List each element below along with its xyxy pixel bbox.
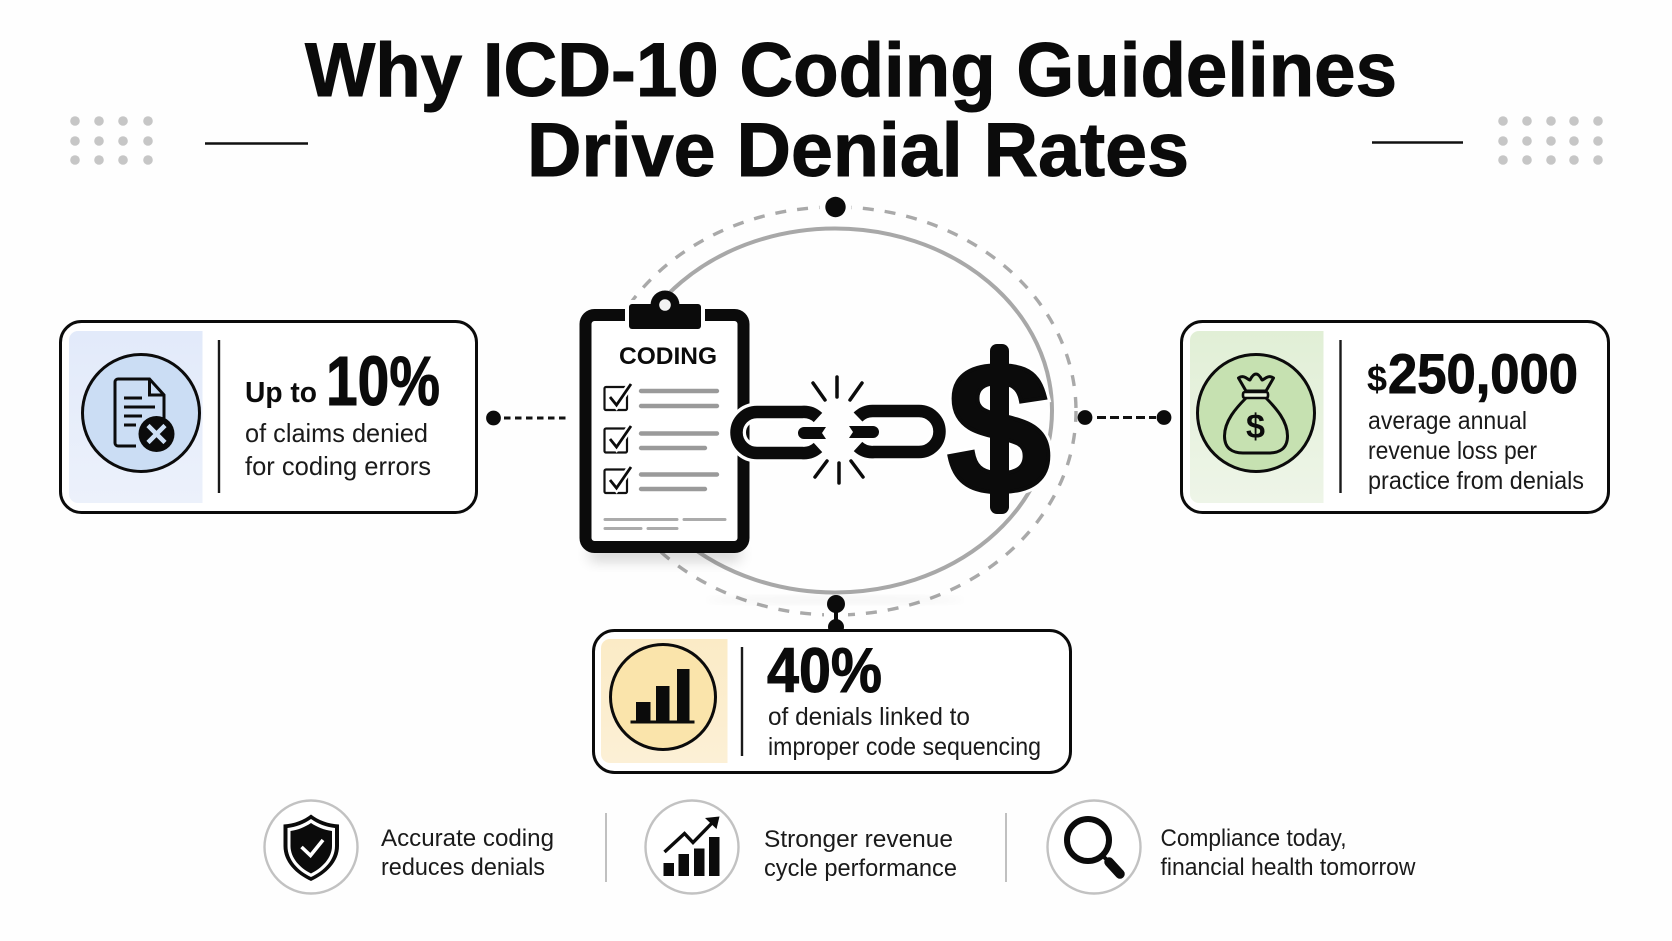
stat: up to 10%: 10% — [326, 342, 440, 420]
description: average annual — [1368, 407, 1527, 435]
takeaway: accurate coding — [264, 800, 554, 894]
description — [1368, 407, 1584, 495]
panel: claims denied — [60, 322, 476, 512]
description: for coding errors — [245, 451, 431, 481]
icon: dollar sign: $ — [947, 323, 1051, 535]
icon: broken chain — [736, 377, 939, 483]
top orbit node — [820, 191, 852, 223]
label: Accurate coding — [381, 825, 554, 852]
decoration: right dot grid — [1498, 116, 1603, 165]
stat: up to 10% — [245, 342, 440, 420]
icon tile — [1190, 331, 1324, 503]
icon: denied document — [82, 354, 200, 472]
stat: up to 10%: Up to — [245, 377, 317, 409]
description: of claims denied — [245, 418, 428, 448]
icon: magnifying glass — [1048, 800, 1140, 894]
left link — [736, 412, 826, 453]
stat: $250,000: $ — [1367, 358, 1387, 399]
icon tile — [69, 331, 202, 503]
label — [764, 826, 957, 882]
label: Stronger revenue — [764, 826, 953, 853]
stat: 40%: 40% — [767, 636, 882, 706]
icon: growth chart — [646, 800, 738, 894]
label — [1160, 825, 1416, 881]
label — [381, 825, 554, 881]
icon: shield — [264, 800, 358, 894]
description: practice from denials — [1368, 467, 1584, 495]
icon: money bag — [1198, 354, 1314, 472]
clipboard clip — [629, 290, 701, 329]
label: reduces denials — [381, 854, 545, 881]
description — [768, 703, 1041, 761]
clipboard label: CODING — [619, 343, 717, 370]
right link — [849, 411, 939, 452]
label: Compliance today, — [1160, 825, 1346, 852]
icon tile — [601, 639, 728, 763]
title: Why ICD-10 Coding Guidelines — [305, 28, 1397, 113]
title: Drive Denial Rates — [527, 108, 1189, 193]
description: of denials linked to — [768, 703, 970, 731]
title — [305, 28, 1397, 193]
takeaway: compliance — [1048, 800, 1416, 894]
icon: bar chart — [610, 644, 716, 750]
icon: clipboard — [586, 290, 744, 560]
description: revenue loss per — [1368, 437, 1537, 465]
stat: $250,000: 250,000 — [1388, 342, 1578, 405]
label: financial health tomorrow — [1160, 854, 1416, 881]
label: cycle performance — [764, 855, 957, 882]
break burst rays — [813, 377, 863, 483]
bottom connector nodes — [824, 595, 848, 635]
panel: code sequencing — [594, 630, 1070, 772]
description — [245, 418, 431, 481]
left connector — [486, 411, 568, 425]
takeaway: revenue cycle — [646, 800, 957, 894]
description: improper code sequencing — [768, 733, 1041, 761]
checklist — [604, 384, 725, 528]
right connector — [1078, 410, 1171, 425]
icon: dollar sign: $ — [947, 323, 1051, 535]
central orbit rings — [594, 207, 1076, 615]
panel: revenue loss — [1182, 322, 1608, 512]
decoration: left dot grid — [70, 116, 153, 165]
icon: money bag: $ — [1246, 408, 1265, 446]
